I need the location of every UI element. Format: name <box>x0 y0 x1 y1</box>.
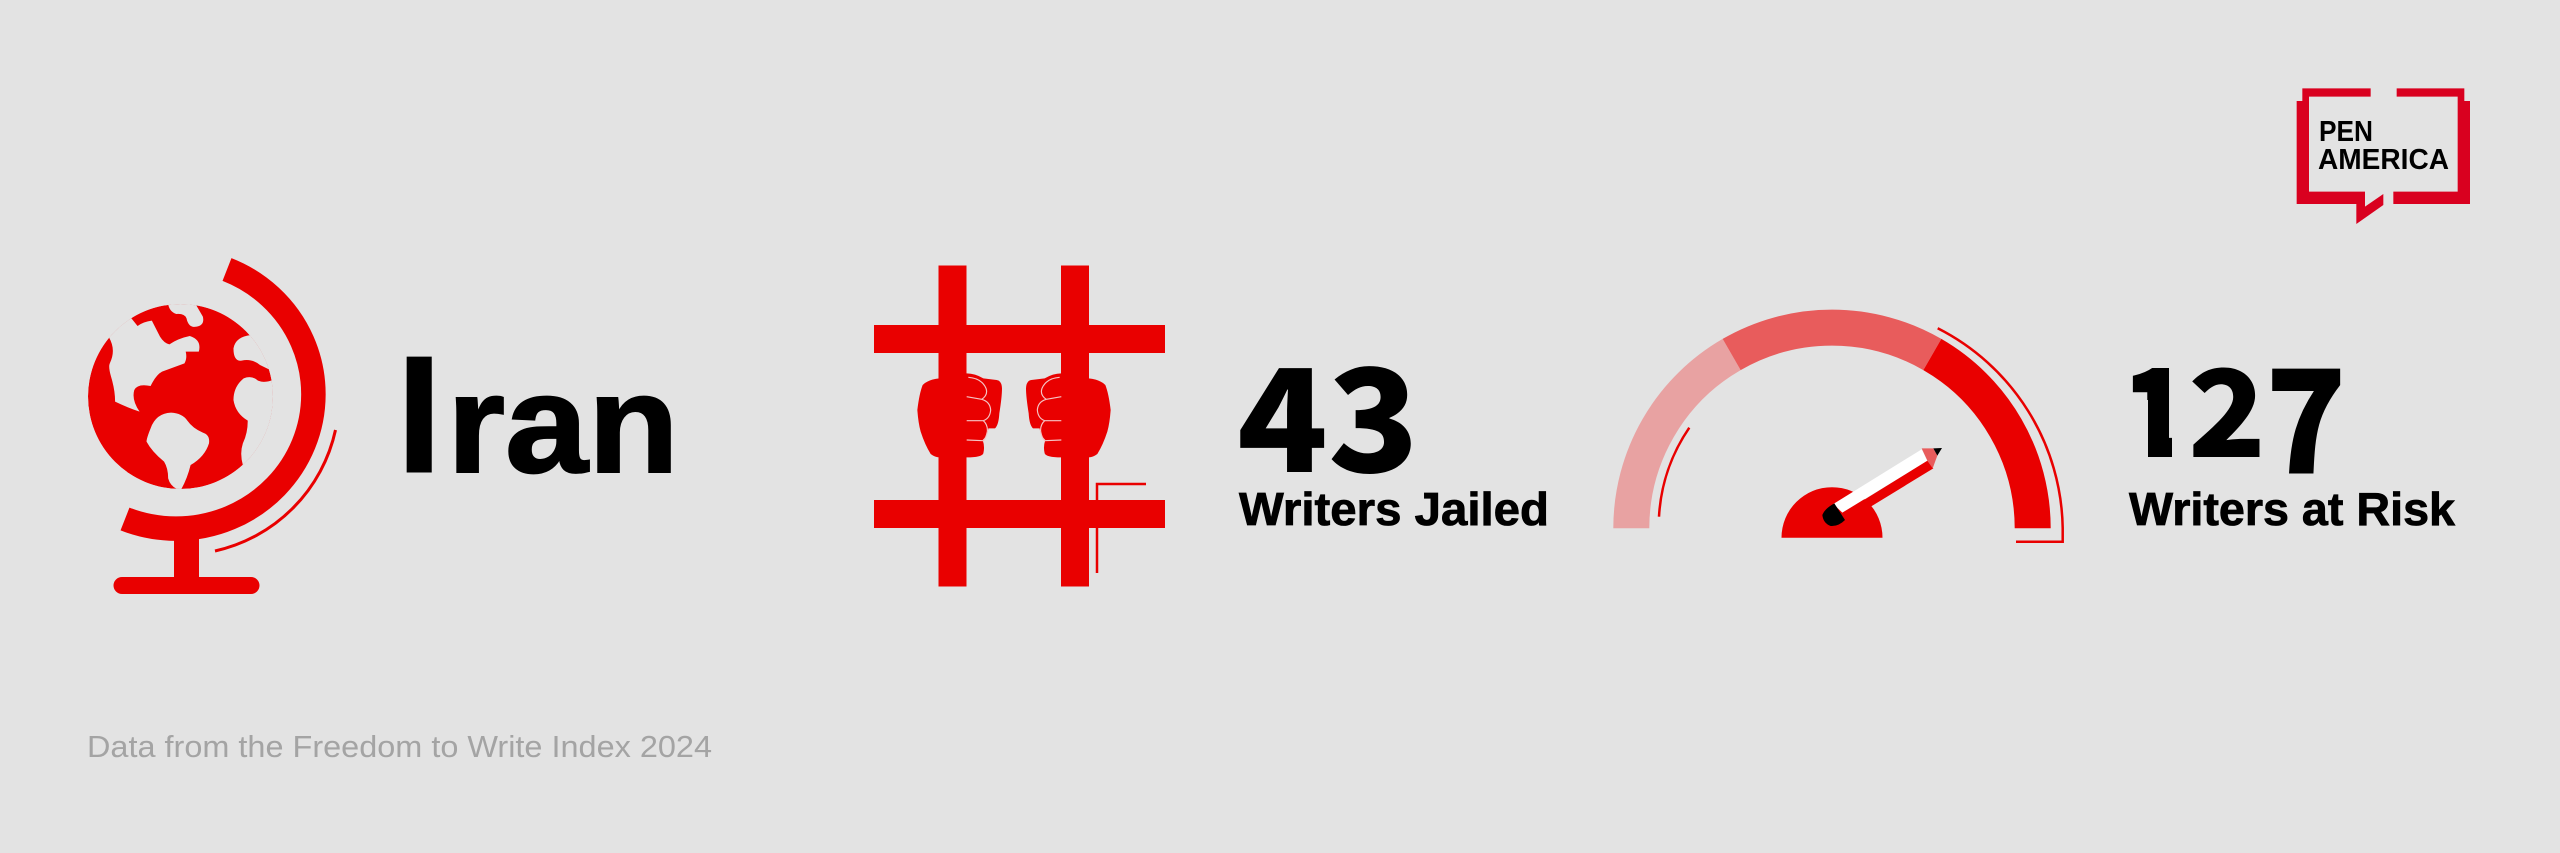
gauge mid segment <box>1732 328 1932 354</box>
globe ball with continents <box>88 304 273 489</box>
number 43: 43 <box>1237 307 1419 514</box>
number 127: 7 <box>2266 308 2346 515</box>
globe frame arc <box>125 270 313 529</box>
number 127 <box>2132 368 2340 474</box>
logo text: PEN <box>2319 116 2373 148</box>
icon: prison bars with fists <box>874 266 1165 586</box>
footer: source note: Data from the Freedom to Write Index 2024 <box>87 729 712 764</box>
logo: PEN America <box>2297 88 2470 224</box>
logo: PEN America: AMERICA <box>2318 144 2449 176</box>
right fist <box>1026 373 1111 457</box>
heading: country name: I <box>396 322 442 508</box>
stat: writers jailed <box>1237 307 1549 535</box>
globe thin accent arc <box>215 430 336 551</box>
icon: globe <box>84 270 336 594</box>
thin accent line <box>1097 484 1146 573</box>
globe stand <box>114 538 260 594</box>
heading: country name <box>396 322 679 508</box>
chart: risk gauge <box>1631 328 2063 542</box>
gauge low segment <box>1631 354 1732 528</box>
gauge high segment <box>1932 354 2033 528</box>
left fist <box>917 373 1002 457</box>
inner accent arc <box>1659 428 1689 517</box>
label: Writers Jailed <box>1239 483 1549 535</box>
outer accent line <box>1938 328 2063 542</box>
gauge hub <box>1782 487 1882 538</box>
pencil needle <box>1822 448 1942 526</box>
number 127: 1 <box>2124 317 2188 492</box>
number 127: 2 <box>2188 317 2266 492</box>
heading: country name: ran <box>447 345 679 502</box>
stat: writers at risk <box>2128 368 2456 526</box>
label: Writers at Risk <box>2129 483 2455 535</box>
logo speech-bubble frame <box>2297 88 2470 224</box>
bars <box>874 266 1165 586</box>
